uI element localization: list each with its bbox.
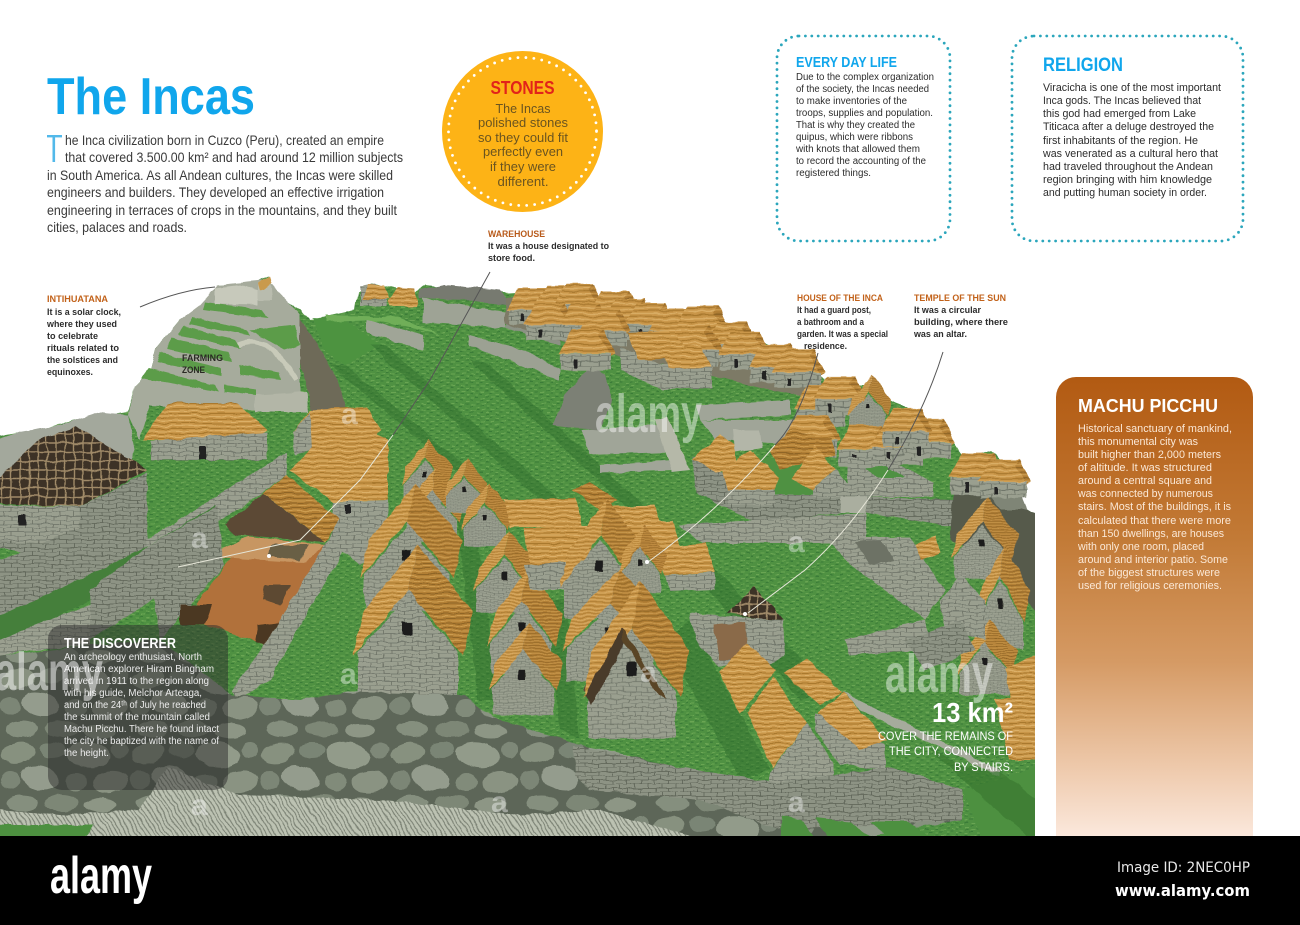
panel: machu picchu: [1056, 377, 1253, 836]
panel: religion: RELIGION: [1043, 54, 1123, 76]
bottom watermark bar: alamy: [50, 847, 152, 905]
panel: every day life: to make inventories of the: [796, 96, 907, 107]
hut with bare lattice roof: [0, 427, 147, 560]
upper grass terraces and walls: [312, 318, 382, 365]
callout: temple of the sun: It was a circular: [914, 305, 981, 316]
round stone tower with lattice roof: [690, 587, 785, 668]
panel: machu picchu: of altitude. It was structured: [1078, 462, 1212, 474]
panel: machu picchu: built higher than 2,000 meters: [1078, 449, 1222, 461]
title: The Incas: [47, 68, 255, 126]
right lower ruins: [827, 535, 985, 670]
intro text block: engineering in terraces of crops in the mountains, and they built: [47, 202, 397, 218]
panel: machu picchu: MACHU PICCHU: [1078, 396, 1218, 416]
callout: warehouse: It was a house designated to: [488, 241, 609, 252]
tall thatched warehouse: [290, 423, 388, 565]
panel: the discoverer: the height.: [64, 748, 109, 759]
rock face right: [950, 480, 1045, 620]
courtyard and big walls: [677, 457, 953, 543]
small house behind tall house: [293, 407, 382, 470]
callout: stones: STONES: [490, 78, 554, 98]
panel: religion: first inhabitants of the region. He: [1043, 135, 1198, 147]
callout: house of the inca: [797, 293, 888, 352]
intro text block: that covered 3.500.00 km² and had around 12 million subjects: [65, 149, 403, 165]
panel: machu picchu: around and interior patio. Some: [1078, 554, 1228, 566]
panel: machu picchu: of the biggest structures were: [1078, 567, 1220, 579]
panel: machu picchu: with only one room, placed: [1077, 541, 1204, 553]
callout: intihuatana: It is a solar clock,: [47, 307, 121, 318]
callout: warehouse: store food.: [488, 253, 535, 264]
panel: the discoverer: [48, 625, 228, 790]
panel: machu picchu: Historical sanctuary of mankind,: [1078, 423, 1232, 435]
callout: stones: polished stones: [478, 115, 568, 130]
label: farming zone: FARMING: [182, 353, 223, 364]
callout: stones: [442, 51, 603, 212]
intihuatana hilltop buildings: [215, 277, 272, 305]
large back thatched hut: [143, 403, 267, 460]
stat: 13 km2: COVER THE REMAINS OF: [878, 729, 1013, 743]
farming terraces: [142, 302, 300, 396]
watermarks in the illustration: a: [640, 656, 657, 689]
watermarks in the illustration: alamy: [595, 384, 702, 444]
right rim houses: [783, 376, 955, 467]
callout: intihuatana: the solstices and: [47, 355, 118, 366]
grass channel lines: [330, 345, 830, 780]
stat: 13 km2: 13 km²: [932, 697, 1013, 728]
panel: every day life: EVERY DAY LIFE: [796, 55, 897, 71]
intro text block: in South America. As all Andean cultures, the Incas were skilled: [47, 167, 393, 183]
intro text block: engineers and builders. They developed an effective irrigation: [47, 184, 384, 200]
panel: every day life: registered things.: [796, 168, 871, 179]
panel: religion: this god had emerged from Lake: [1043, 108, 1196, 120]
callout: house of the inca: residence.: [804, 341, 847, 352]
panel: machu picchu: calculated that there were more: [1078, 515, 1231, 527]
panel: religion: Inca gods. The Incas believed that: [1043, 95, 1201, 107]
watermarks in the illustration: a: [788, 526, 805, 559]
watermarks in the illustration: a: [191, 522, 208, 555]
panel: the discoverer: with his guide, Melchor Arteaga,: [63, 688, 202, 699]
far right houses: [948, 453, 1045, 760]
open shed roof: [225, 475, 340, 542]
dense rim of houses backing: [505, 292, 828, 398]
label: farming zone: [182, 353, 223, 376]
callout: temple of the sun: was an altar.: [913, 329, 967, 340]
callout: stones: if they were: [490, 159, 556, 174]
hill and grass base: [0, 277, 1045, 850]
watermarks in the illustration: a: [491, 786, 508, 819]
illustration: Machu Picchu aerial view: [0, 277, 1045, 850]
stone ground and boulder wall: [0, 640, 963, 850]
watermarks in the illustration: a: [1091, 527, 1108, 560]
callout: intihuatana: equinoxes.: [47, 367, 93, 378]
panel: the discoverer: the city he baptized with the name of: [64, 736, 219, 747]
panel: the discoverer: Machu Picchu. There he found intact: [64, 724, 219, 735]
panel: the discoverer: THE DISCOVERER: [64, 635, 176, 652]
watermarks in the illustration: [191, 384, 1257, 822]
callout: temple of the sun: TEMPLE OF THE SUN: [914, 293, 1006, 304]
panel: machu picchu: was connected by numerous: [1077, 488, 1214, 500]
panel: the discoverer: An archeology enthusiast, North: [64, 652, 202, 663]
callout: house of the inca: HOUSE OF THE INCA: [797, 293, 883, 304]
panel: religion: and putting human society in order.: [1043, 187, 1207, 199]
stat: 13 km2: BY STAIRS.: [954, 760, 1013, 774]
stone walkway: [0, 767, 740, 850]
staircase: [655, 415, 690, 472]
panel: religion: Viracicha is one of the most important: [1043, 82, 1221, 94]
rows of gabled houses: [353, 439, 563, 715]
rocks behind left huts: [0, 412, 135, 485]
callout: stones: perfectly even: [483, 144, 563, 159]
panel: religion: Titicaca after a deluge destroyed the: [1043, 121, 1214, 133]
callout: intihuatana: where they used: [46, 319, 117, 330]
watermarks in the illustration: a: [1091, 789, 1108, 822]
lower right thatched houses: [720, 643, 1000, 790]
back row houses on the rim: [360, 283, 825, 388]
panel: every day life: of the society, the Incas needed: [796, 84, 929, 95]
hill stone base: [128, 280, 300, 440]
panel: every day life: troops, supplies and population.: [796, 108, 933, 119]
watermarks in the illustration: a: [1240, 398, 1257, 431]
long stone walls left: [0, 452, 287, 660]
panel: machu picchu: stairs. Most of the buildings, it is: [1078, 501, 1232, 513]
callout: stones: so they could fit: [478, 130, 568, 145]
bottom watermark bar: www.alamy.com: [1115, 881, 1250, 900]
bottom watermark bar: Image ID: 2NEC0HP: [1117, 860, 1250, 876]
enclosed terrace with houses: [692, 430, 855, 523]
panel: every day life: That is why they created the: [796, 120, 915, 131]
tall stone house and terrace block: [620, 330, 712, 390]
callout: intihuatana: rituals related to: [47, 343, 119, 354]
panel: the discoverer: arrived in 1911 to the region along: [64, 676, 209, 687]
callout: temple of the sun: building, where there: [914, 317, 1008, 328]
small stone ruin: [255, 392, 308, 412]
callout: intihuatana: INTIHUATANA: [47, 294, 108, 305]
central gabled row: [560, 499, 689, 738]
panel: religion: was venerated as a cultural hero that: [1042, 148, 1218, 160]
panel: every day life: Due to the complex organization: [796, 72, 934, 83]
panel: machu picchu: around a central square and: [1078, 475, 1212, 487]
callout: house of the inca: a bathroom and a: [797, 317, 865, 328]
watermarks in the illustration: a: [788, 786, 805, 819]
stat: 13 km2: THE CITY, CONNECTED: [889, 744, 1013, 758]
panel: the discoverer: and on the 24ᵗʰ of July he reached: [64, 700, 206, 711]
dark rock column: [296, 320, 345, 412]
panel: every day life: quipus, which were ribbons: [796, 132, 913, 143]
label: farming zone: ZONE: [182, 365, 206, 376]
panel: machu picchu: than 150 dwellings, are houses: [1078, 528, 1225, 540]
right edge terraces: [925, 745, 1045, 850]
bottom watermark bar: [0, 836, 1300, 925]
callout: warehouse: WAREHOUSE: [488, 229, 546, 240]
large grey rock: [553, 365, 612, 430]
panel: the discoverer: the summit of the mountain called: [64, 712, 210, 723]
courtyard: [150, 520, 350, 700]
panel: every day life: [777, 36, 950, 241]
callout: house of the inca: It had a guard post,: [797, 305, 871, 316]
watermarks in the illustration: a: [341, 398, 358, 431]
flat thatched roofs: [505, 482, 715, 592]
intro text block: he Inca civilization born in Cuzco (Peru), created an empire: [65, 132, 384, 148]
panel: machu picchu: this monumental city was: [1078, 436, 1199, 448]
watermarks in the illustration: alamy: [885, 644, 993, 704]
panel: every day life: to record the accounting of the: [796, 156, 926, 167]
callout: warehouse: [488, 229, 609, 264]
green field right: [690, 543, 915, 640]
panel: machu picchu: used for religious ceremonies.: [1078, 580, 1222, 592]
panel: the discoverer: American explorer Hiram Bingham: [64, 664, 214, 675]
callout: house of the inca: garden. It was a special: [797, 329, 888, 340]
panel: religion: region bringing with him knowledge: [1043, 174, 1212, 186]
stone wall steps: [573, 745, 963, 830]
curved staircase: [238, 342, 296, 380]
stat: 13 km2: [878, 697, 1013, 774]
stone terrace walls centre: [582, 400, 810, 473]
callout: intihuatana: [46, 294, 121, 378]
callout: temple of the sun: [913, 293, 1008, 340]
leader lines: [140, 272, 943, 616]
callout: stones: The Incas: [496, 101, 551, 116]
panel: religion: had traveled throughout the Andean: [1043, 161, 1213, 173]
intro text block: [47, 132, 403, 235]
callout: intihuatana: to celebrate: [47, 331, 98, 342]
callout: stones: different.: [498, 174, 548, 189]
panel: every day life: with knots that allowed them: [795, 144, 920, 155]
watermarks in the illustration: a: [340, 658, 357, 691]
panel: religion: [1012, 36, 1243, 241]
watermarks in the illustration: a: [191, 789, 208, 822]
clean right edge of illustration: [1035, 370, 1056, 840]
intro text block: cities, palaces and roads.: [47, 219, 187, 235]
green terraces lower right: [780, 765, 1045, 850]
